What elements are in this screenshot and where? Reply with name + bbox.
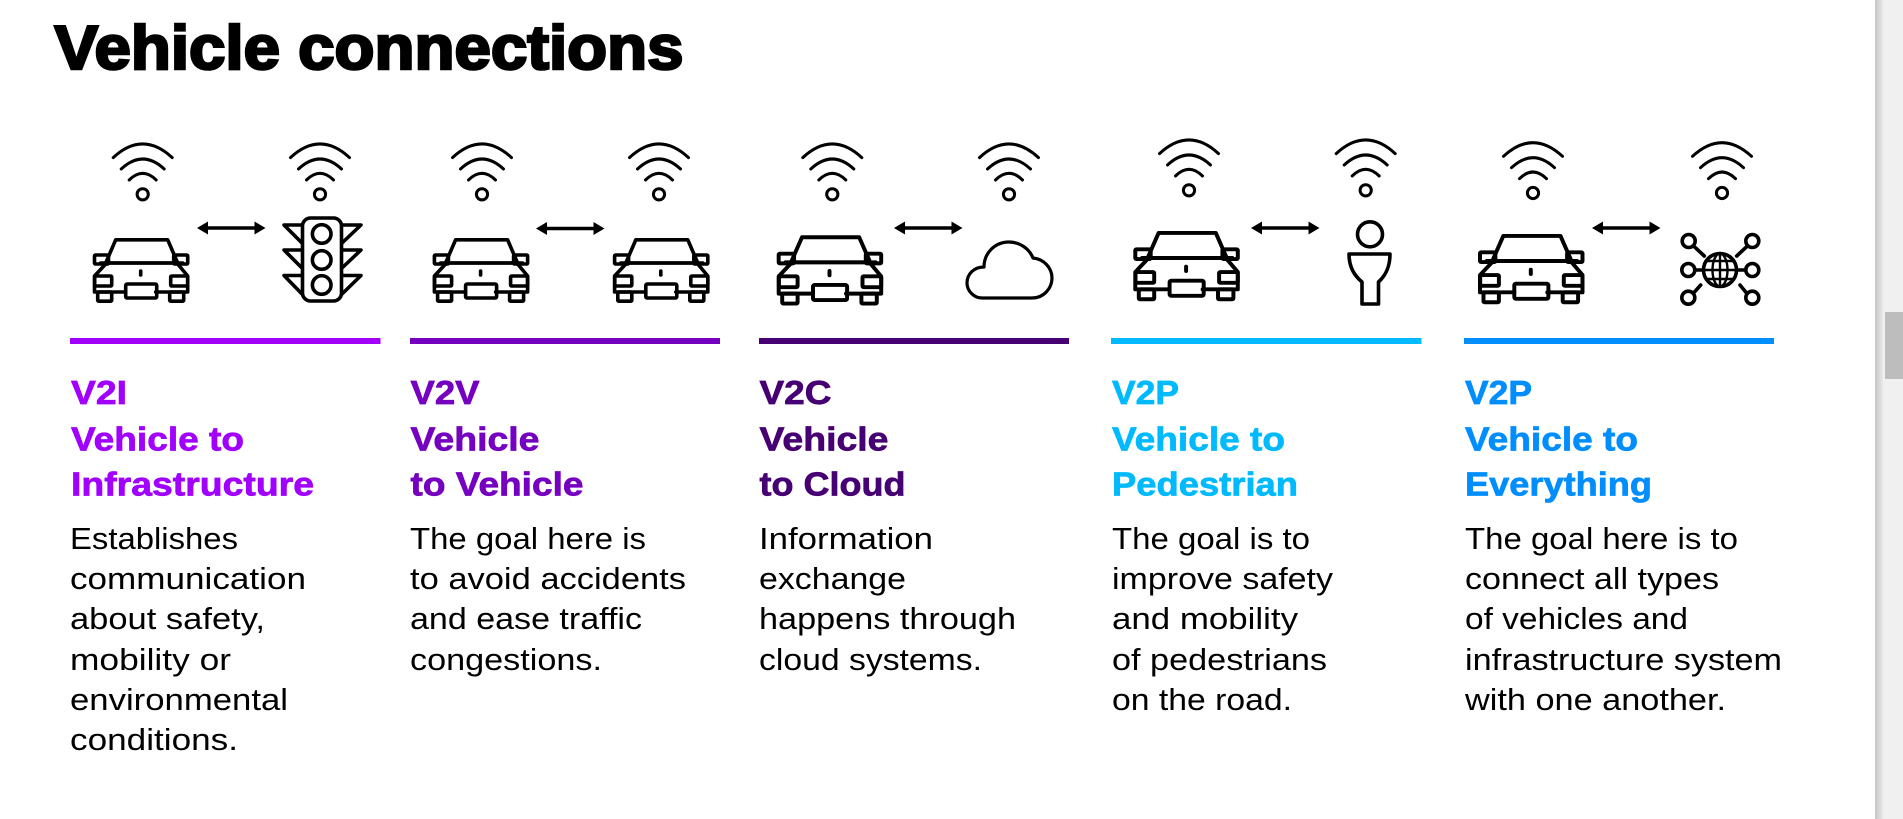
description: mobility or (70, 642, 231, 677)
icon: car wifi signal (803, 144, 862, 200)
heading (1465, 375, 1652, 504)
description: on the road. (1112, 682, 1292, 717)
heading: Vehicle to (71, 422, 244, 458)
description: connect all types (1465, 561, 1719, 596)
description (1464, 521, 1782, 717)
heading: Vehicle (760, 422, 888, 458)
icon: car (1135, 233, 1238, 299)
description (1112, 521, 1334, 717)
icon: car (779, 237, 881, 304)
heading: Infrastructure (71, 466, 314, 504)
heading (410, 375, 584, 504)
icon: car (94, 240, 188, 301)
description: communication (70, 561, 306, 596)
description: Establishes (70, 521, 238, 556)
icon: cloud (967, 242, 1052, 298)
heading: V2I (71, 375, 127, 412)
description: to avoid accidents (410, 561, 686, 596)
heading: Vehicle to (1465, 422, 1638, 458)
description: The goal here is (410, 521, 646, 556)
description: conditions. (70, 722, 238, 757)
heading: to Cloud (760, 466, 906, 504)
icon: car wifi signal (1504, 143, 1562, 199)
icon: car wifi signal (113, 144, 172, 200)
arrow: two-way connection (197, 222, 266, 234)
heading: Pedestrian (1112, 466, 1298, 504)
description: The goal is to (1112, 521, 1310, 556)
icon: car (1480, 236, 1582, 302)
icon: first car wifi signal (452, 144, 512, 200)
description: congestions. (410, 642, 602, 677)
icon: pedestrian wifi signal (1336, 140, 1395, 196)
heading: Vehicle to (1112, 422, 1285, 458)
description (759, 521, 1016, 677)
scrollbar (1875, 0, 1903, 819)
description: improve safety (1112, 561, 1334, 596)
description: exchange (759, 561, 906, 596)
description: and ease traffic (410, 601, 642, 636)
icon: second car (615, 240, 708, 301)
title: Vehicle connections (54, 14, 684, 83)
heading (1112, 375, 1298, 504)
heading: V2P (1112, 375, 1179, 412)
arrow: two-way connection (1251, 222, 1320, 234)
heading: V2C (760, 375, 832, 412)
icon: car wifi signal (1160, 140, 1218, 196)
icon: first car (434, 240, 528, 301)
colour rule (1111, 338, 1422, 344)
description: with one another. (1464, 682, 1726, 717)
colour rule (1464, 338, 1774, 344)
panel: V2V vehicle to vehicle (410, 144, 720, 677)
heading: Everything (1465, 466, 1652, 504)
panel: V2C vehicle to cloud (759, 144, 1069, 677)
arrow: two-way connection (894, 222, 962, 234)
description: happens through (759, 601, 1016, 636)
panel: V2P vehicle to everything (1464, 143, 1782, 717)
icon: cloud wifi signal (980, 144, 1038, 200)
arrow: two-way connection (1592, 222, 1660, 234)
description: environmental (70, 682, 288, 717)
description (410, 521, 686, 677)
heading: V2V (410, 375, 480, 412)
arrow: two-way connection (536, 222, 604, 235)
description: The goal here is to (1465, 521, 1738, 556)
heading (760, 375, 906, 504)
icon: network wifi signal (1692, 143, 1752, 199)
colour rule (70, 338, 380, 344)
icon: traffic light (284, 218, 361, 301)
heading: to Vehicle (410, 466, 584, 504)
description: and mobility (1112, 601, 1299, 636)
description: Information (759, 521, 933, 556)
icon: traffic light wifi signal (290, 144, 350, 200)
panel: V2I vehicle to infrastructure (70, 144, 380, 757)
icon: pedestrian (1349, 222, 1390, 304)
description: of pedestrians (1112, 642, 1327, 677)
description: about safety, (70, 601, 265, 636)
heading: V2P (1465, 375, 1532, 412)
description: cloud systems. (759, 642, 982, 677)
heading: Vehicle (410, 422, 540, 458)
icon: connected globe network (1682, 234, 1759, 304)
icon: second car wifi signal (630, 144, 688, 200)
panel: V2P vehicle to pedestrian (1111, 140, 1422, 717)
description (70, 521, 306, 757)
description: infrastructure system (1465, 642, 1782, 677)
description: of vehicles and (1465, 601, 1688, 636)
colour rule (410, 338, 720, 344)
heading (71, 375, 314, 504)
colour rule (759, 338, 1069, 344)
